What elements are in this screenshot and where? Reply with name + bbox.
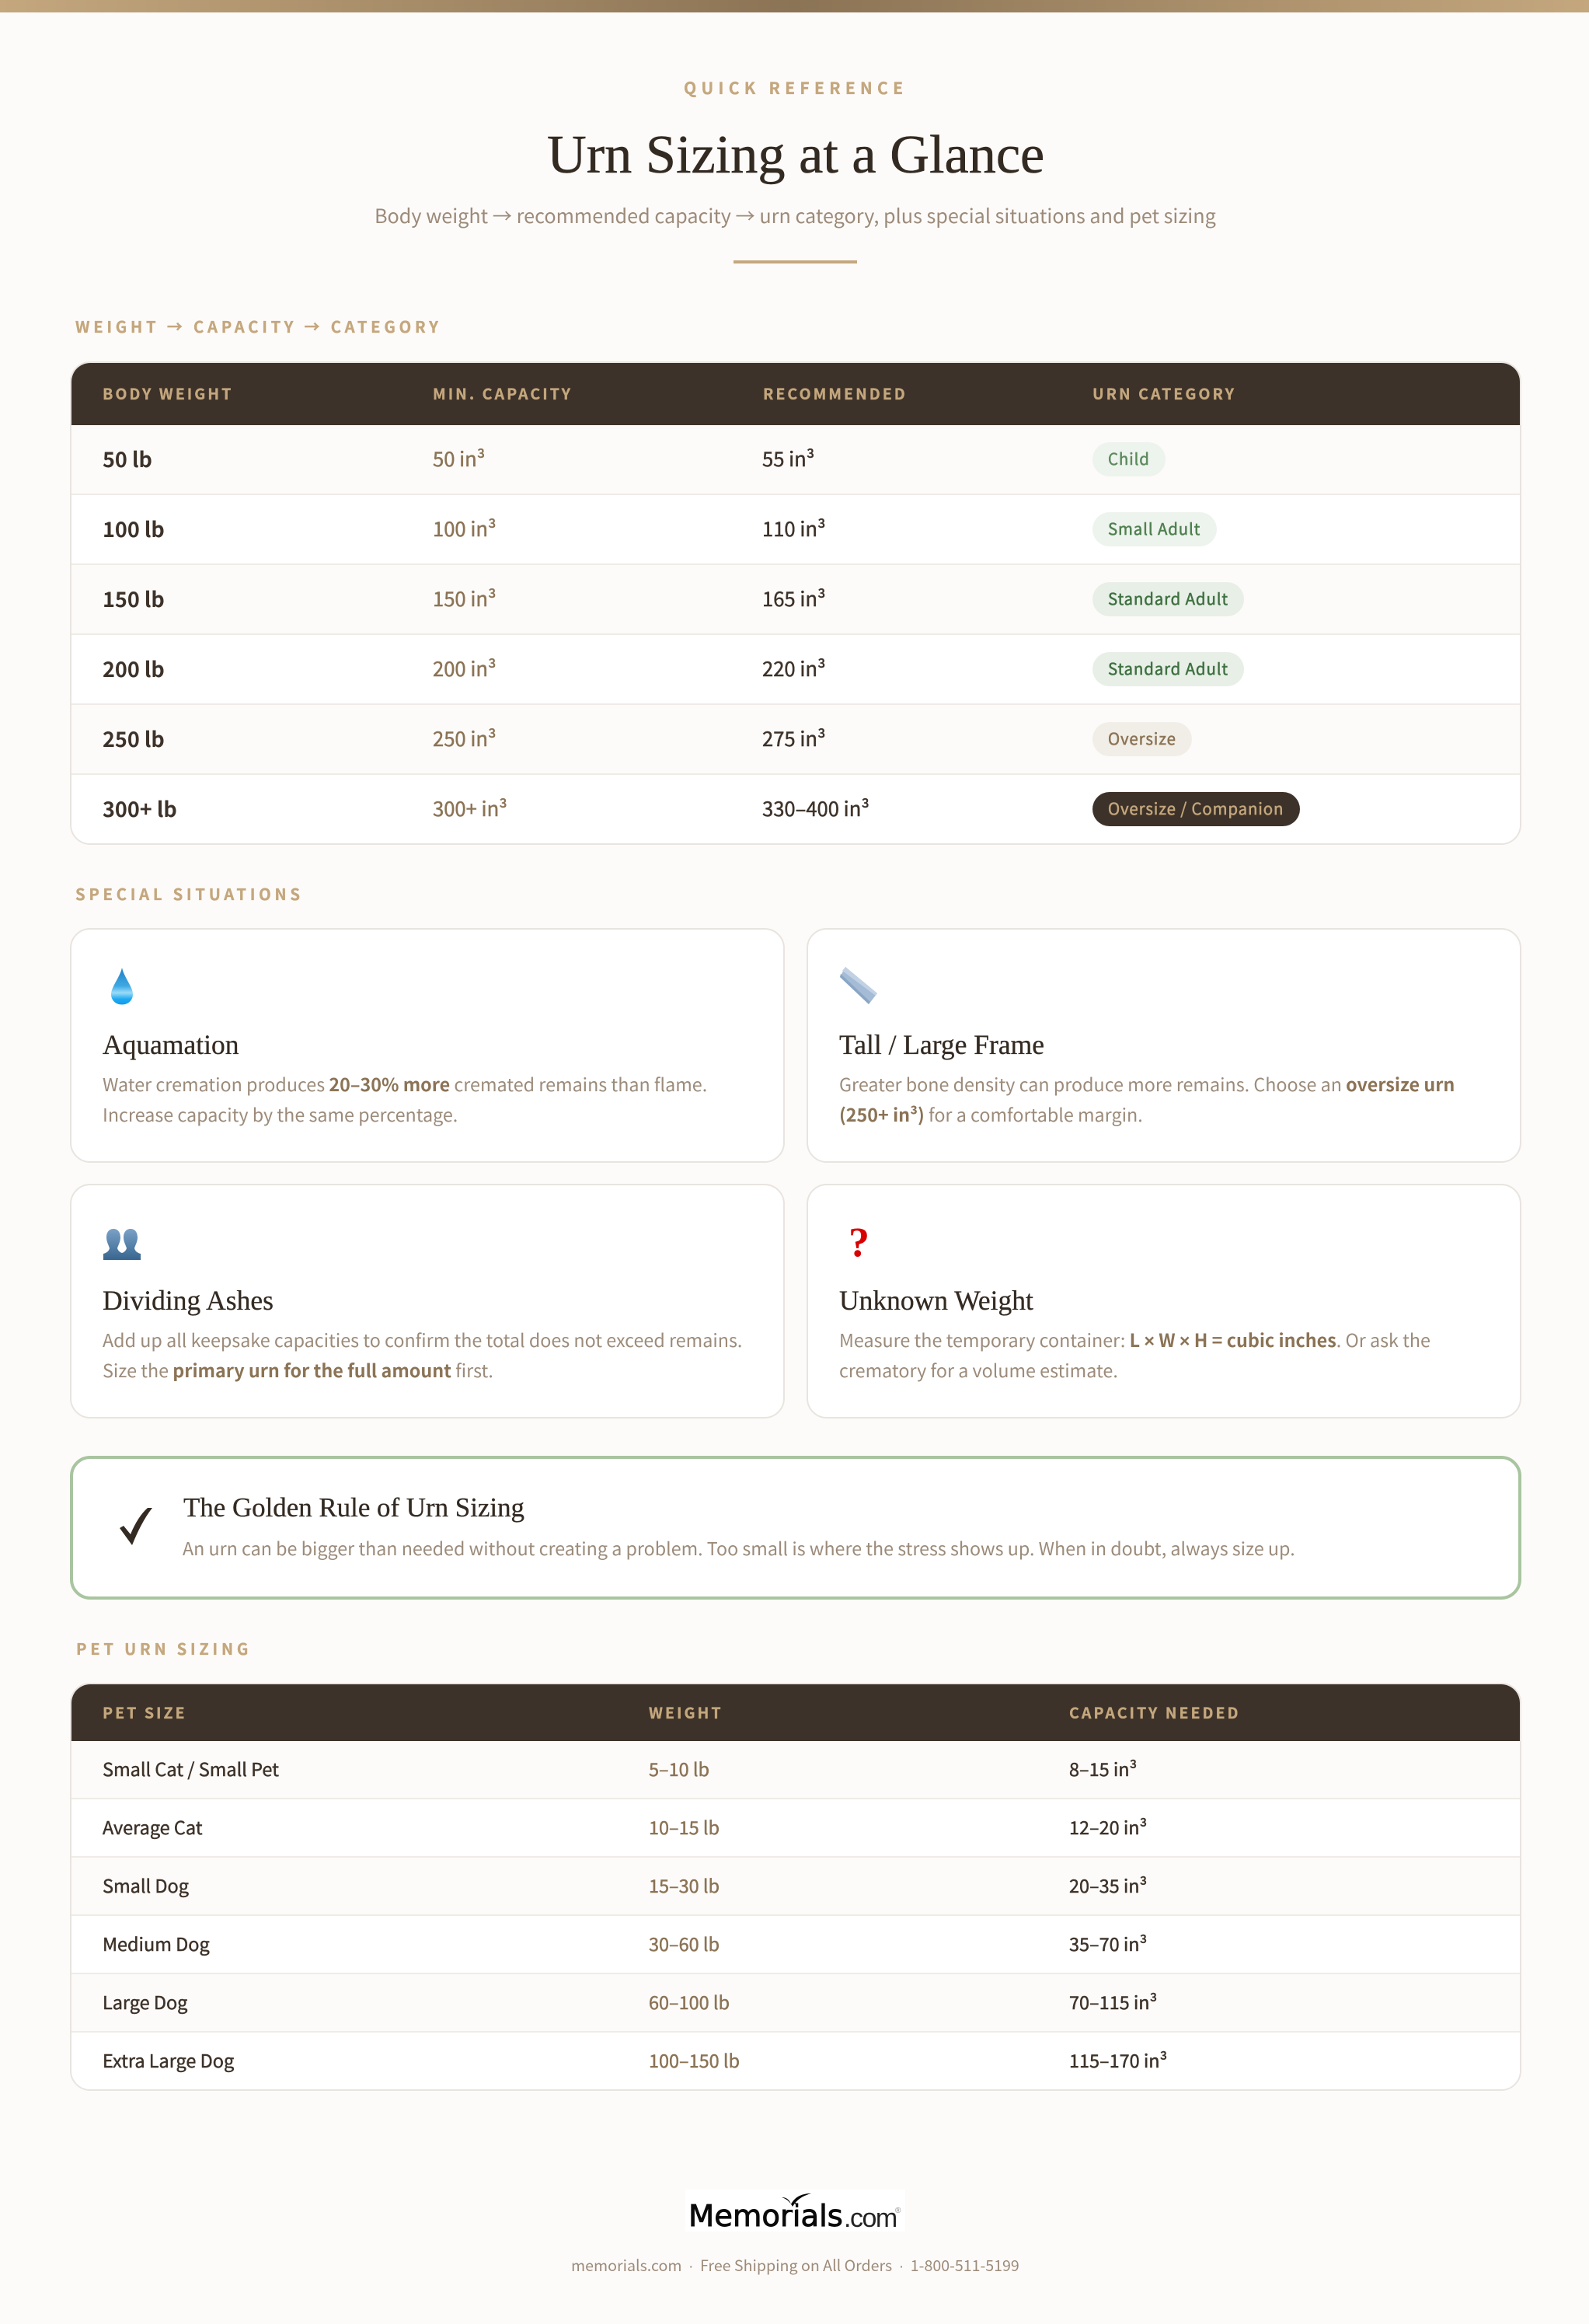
row: 150 lb: 150 in³ [433,584,497,612]
row: 300+ lb: 330–400 in³ [762,794,869,822]
section label: special situations: SPECIAL SITUATIONS [75,882,304,905]
row: large dog: Large Dog [103,1988,187,2015]
title: Urn Sizing at a Glance [547,124,1044,185]
divider [734,260,857,263]
subtitle: Body weight → recommended capacity → urn category, plus special situations and pet sizing [375,201,1216,229]
row: 150 lb: Standard Adult [1108,586,1228,609]
row: 100 lb: 110 in³ [762,514,826,543]
row: medium dog: 30–60 lb [649,1930,720,1956]
logo suffix: .com [844,2204,897,2233]
row: extra large dog [71,2033,1520,2089]
table: pet urn sizing [70,1683,1521,2091]
card: dividing ashes [70,1184,785,1418]
row: 100 lb [71,495,1520,565]
card body: Measure the temporary container: L × W × H = cubic inches. Or ask the [839,1326,1430,1352]
row: extra large dog: Extra Large Dog [103,2047,234,2073]
row: 200 lb: 220 in³ [762,654,826,682]
row: 250 lb [71,705,1520,775]
row: large dog: 60–100 lb [649,1988,730,2015]
card body: crematory for a volume estimate. [839,1356,1118,1383]
table header: BODY WEIGHT [103,382,233,404]
card title: Tall / Large Frame [839,1029,1044,1060]
card body [839,1070,1455,1127]
row: small cat: 8–15 in³ [1069,1755,1137,1781]
row: 250 lb: Oversize [1108,726,1176,749]
card: tall or large frame [807,928,1521,1163]
row: small dog: 15–30 lb [649,1872,720,1898]
logo wordmark: Memorials [688,2199,843,2234]
logo registered mark: ® [895,2207,901,2215]
card: unknown weight [807,1184,1521,1418]
row: large dog: 70–115 in³ [1069,1988,1157,2015]
row: extra large dog: 100–150 lb [649,2047,740,2073]
row: 250 lb: 250 in³ [433,724,497,752]
row: 150 lb: 150 lb [103,583,165,613]
table header [71,1684,1520,1741]
card body: Increase capacity by the same percentage. [103,1101,458,1127]
card body: Add up all keepsake capacities to confirm the total does not exceed remains. [103,1326,742,1352]
row: small cat [71,1741,1520,1799]
section label: pet urn sizing: PET URN SIZING [76,1637,252,1659]
top gradient bar [0,0,1589,12]
row: medium dog: Medium Dog [103,1930,210,1956]
icon: question mark: ? [849,1219,869,1265]
row: 300+ lb: 300+ lb [103,793,177,823]
table header: WEIGHT [649,1701,723,1723]
row: 150 lb [71,565,1520,635]
table header: CAPACITY NEEDED [1069,1701,1241,1723]
icon: ruler [840,967,877,1004]
footer contact line: memorials.com · Free Shipping on All Orders · 1-800-511-5199 [571,2253,1019,2276]
section label: weight capacity category: WEIGHT → CAPACITY → CATEGORY [75,315,442,337]
callout body: An urn can be bigger than needed without creating a problem. Too small is where the stress shows up. When in doubt, always size up. [183,1534,1295,1561]
row: 50 lb: 55 in³ [762,444,814,473]
card: aquamation [70,928,785,1163]
row: 50 lb: 50 lb [103,443,152,473]
table header: PET SIZE [103,1701,187,1723]
row: 200 lb [71,635,1520,705]
row: 50 lb: Child [1108,446,1150,469]
card title: Unknown Weight [839,1285,1033,1316]
table: weight to capacity to category [70,361,1521,845]
card body: Size the primary urn for the full amount first. [103,1356,493,1383]
icon: water drop [111,968,133,1004]
callout title: The Golden Rule of Urn Sizing [183,1492,524,1523]
row: large dog [71,1974,1520,2033]
card body [839,1326,1430,1383]
row: 150 lb: 165 in³ [762,584,826,612]
row: extra large dog: 115–170 in³ [1069,2047,1167,2073]
row: medium dog [71,1916,1520,1974]
row: average cat: Average Cat [103,1813,203,1840]
card body [103,1326,742,1383]
row: average cat [71,1799,1520,1858]
logo: Memorials.com [685,2190,905,2232]
row: 250 lb: 275 in³ [762,724,826,752]
row: 50 lb [71,425,1520,495]
row: 250 lb: 250 lb [103,723,165,753]
row: 300+ lb [71,775,1520,843]
table header: MIN. CAPACITY [433,382,573,404]
logo bird [782,2193,811,2210]
callout: golden rule [70,1456,1521,1600]
table header: RECOMMENDED [763,382,908,404]
row: 100 lb: Small Adult [1108,516,1200,539]
table header: URN CATEGORY [1092,382,1236,404]
card body: Greater bone density can produce more remains. Choose an oversize urn [839,1070,1455,1097]
row: 300+ lb: 300+ in³ [433,794,507,822]
card body [103,1070,707,1127]
row: 50 lb: 50 in³ [433,444,485,473]
row: 200 lb: Standard Adult [1108,656,1228,679]
row: 100 lb: 100 in³ [433,514,497,543]
card title: Aquamation [103,1029,239,1060]
icon: two people [103,1229,141,1260]
row: small cat: 5–10 lb [649,1755,709,1781]
icon: check mark [120,1508,152,1545]
row: small dog [71,1858,1520,1916]
header [375,76,1216,263]
table header [71,363,1520,425]
row: 200 lb: 200 in³ [433,654,497,682]
row: medium dog: 35–70 in³ [1069,1930,1147,1956]
card title: Dividing Ashes [103,1285,274,1316]
row: 100 lb: 100 lb [103,513,165,543]
row: 300+ lb: Oversize / Companion [1108,796,1284,819]
card body: (250+ in³) for a comfortable margin. [839,1101,1143,1127]
eyebrow: quick reference: QUICK REFERENCE [684,76,908,99]
row: average cat: 12–20 in³ [1069,1813,1147,1840]
row: small cat: Small Cat / Small Pet [103,1755,279,1781]
row: 200 lb: 200 lb [103,653,165,683]
row: small dog: 20–35 in³ [1069,1872,1147,1898]
card body: Water cremation produces 20–30% more cremated remains than flame. [103,1070,707,1097]
row: average cat: 10–15 lb [649,1813,720,1840]
row: small dog: Small Dog [103,1872,189,1898]
